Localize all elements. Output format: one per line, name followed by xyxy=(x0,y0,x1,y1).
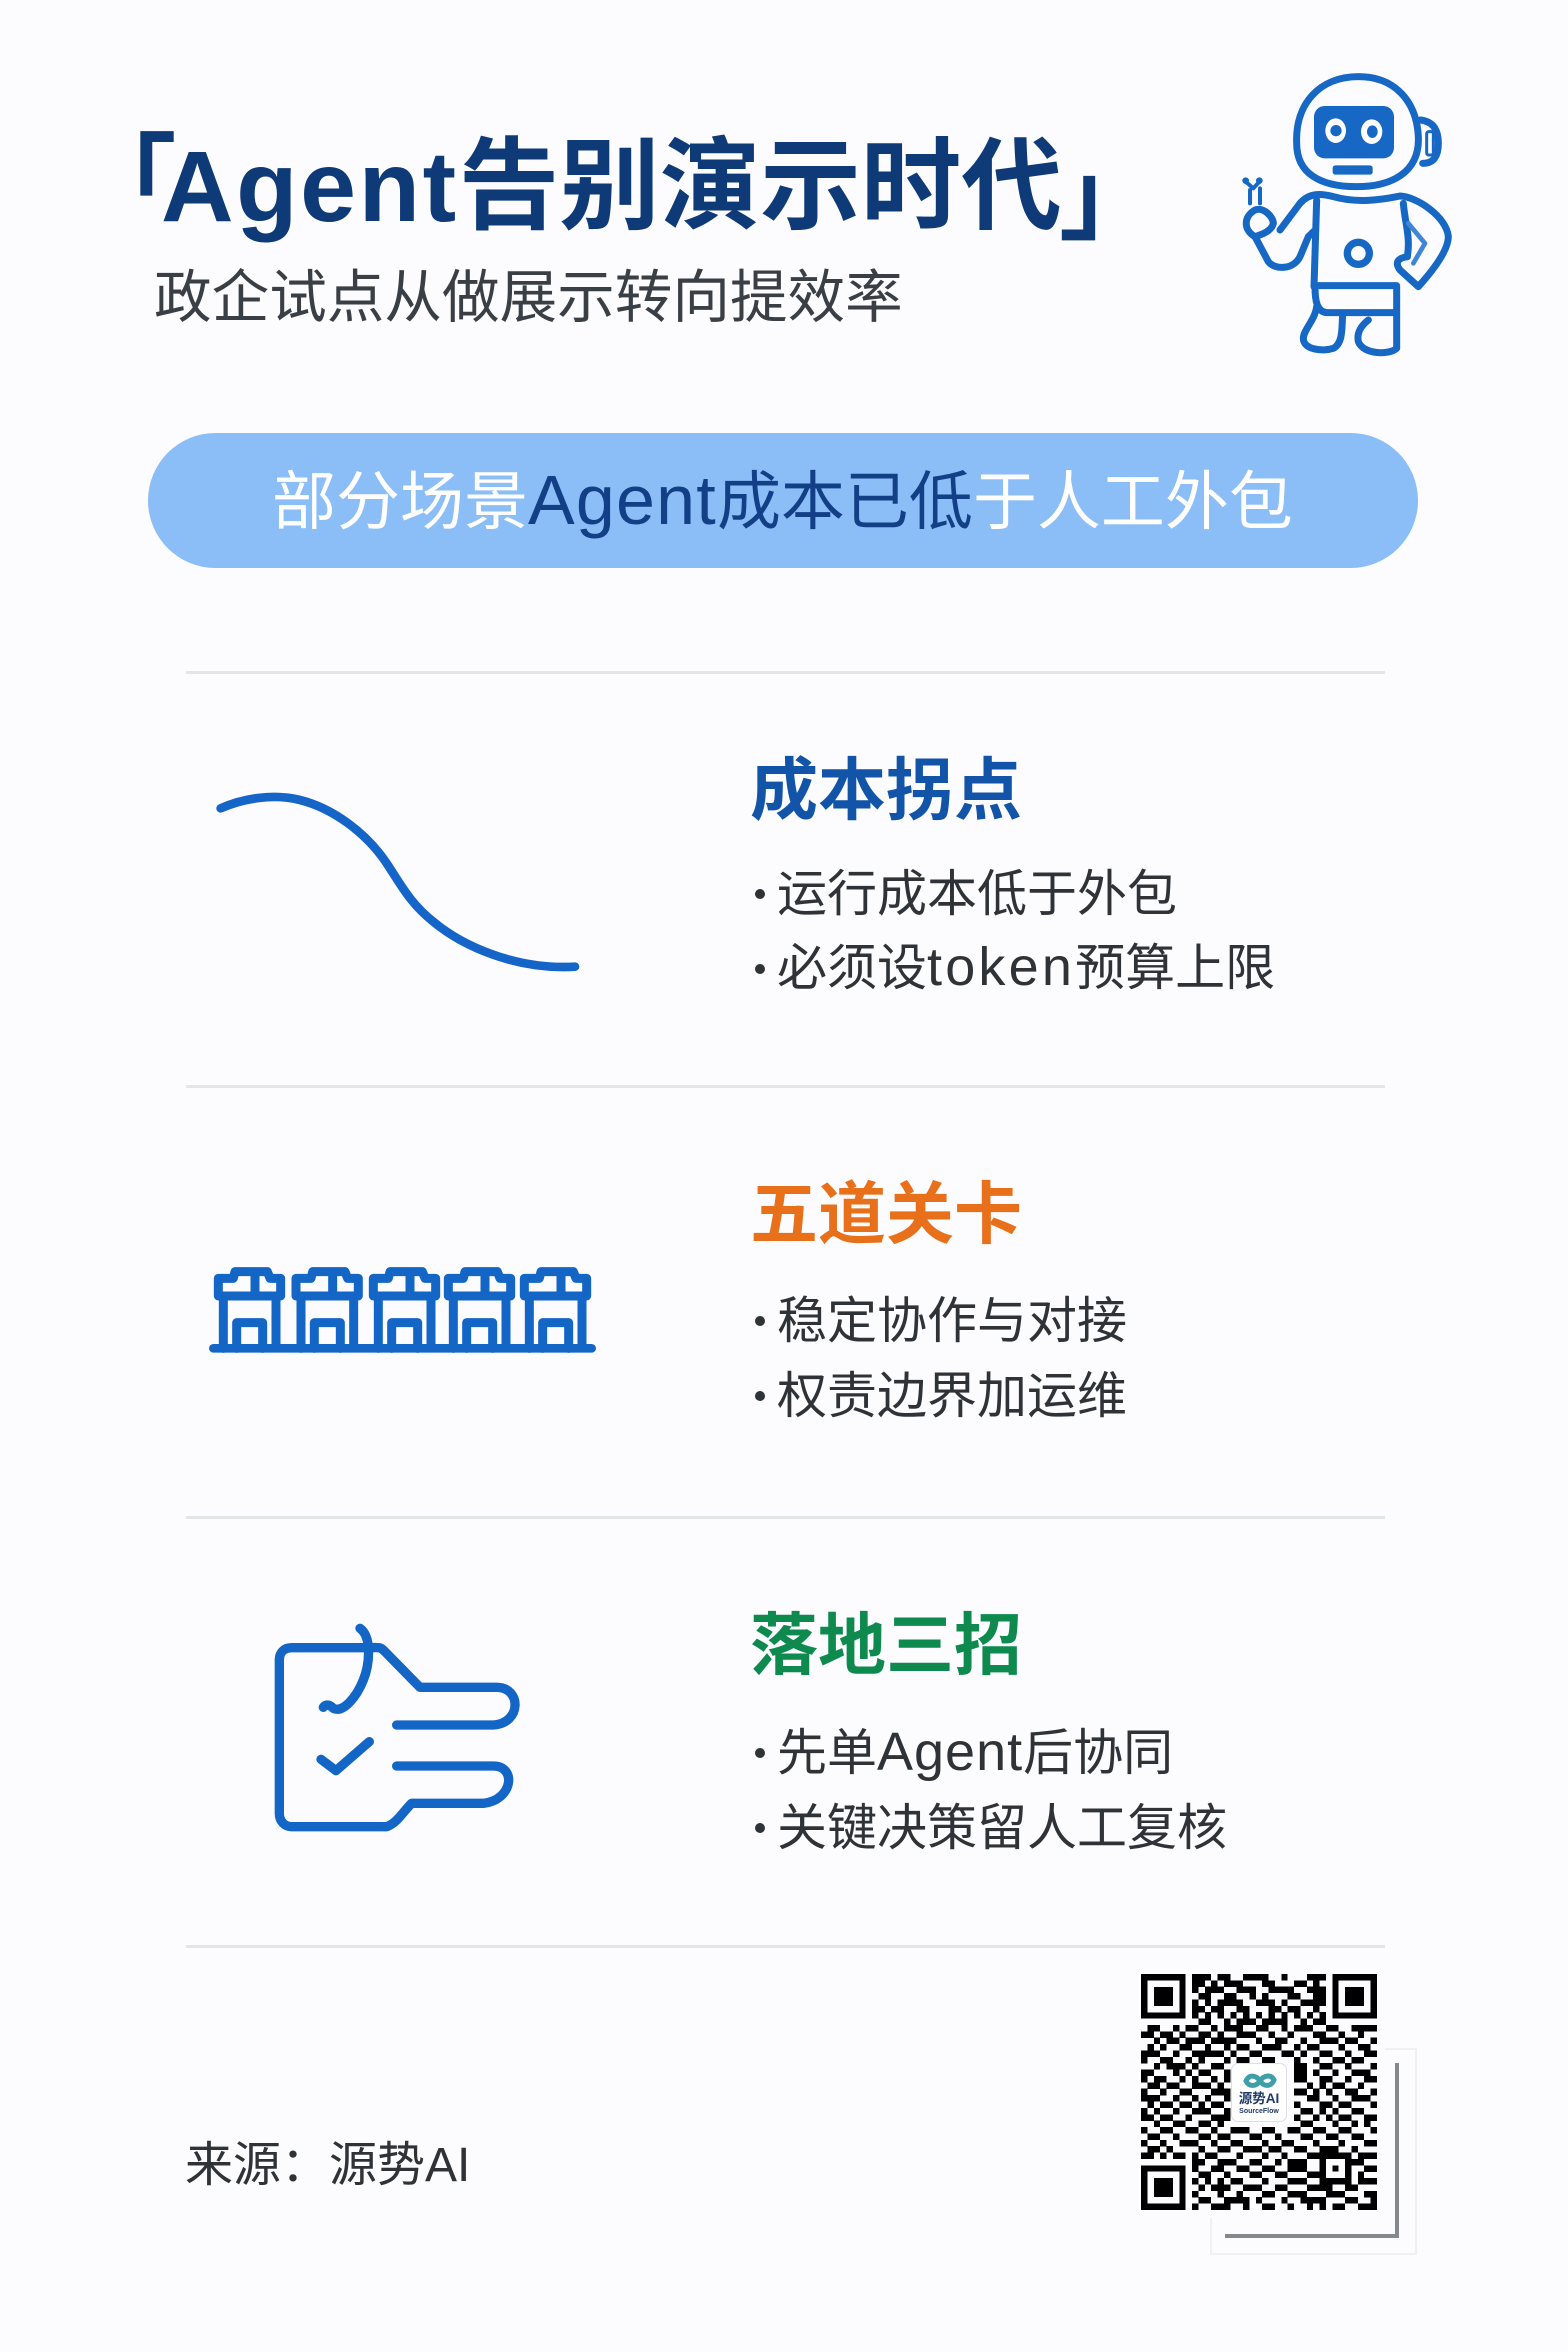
panel: 落地三招 xyxy=(274,1608,1227,1856)
bullet marker xyxy=(755,1823,765,1833)
bullet marker xyxy=(755,964,765,974)
logo text: 源势AI xyxy=(1239,2091,1279,2106)
banner pill: 部分场景Agent成本已低于人工外包 xyxy=(272,461,1293,539)
icon: falling cost curve xyxy=(216,792,580,972)
QR code block xyxy=(1141,1974,1417,2255)
decorative frame behind QR xyxy=(1210,2048,1417,2255)
icon: robot mascot xyxy=(1242,73,1452,356)
logo mark xyxy=(1243,2074,1277,2088)
bullet marker xyxy=(755,1391,765,1401)
title: 」 xyxy=(1059,141,1160,253)
bullet text: 先单Agent后协同 xyxy=(777,1722,1173,1782)
QR modules xyxy=(1141,1974,1377,2210)
icon: checklist hand xyxy=(274,1624,520,1832)
bullet text: 稳定协作与对接 xyxy=(777,1293,1127,1349)
icon: five gates xyxy=(209,1267,596,1353)
bullet marker xyxy=(755,1748,765,1758)
QR centre logo xyxy=(1231,2063,1287,2122)
source line: 来源：源势AI xyxy=(185,2139,470,2192)
bullet text: 权责边界加运维 xyxy=(777,1368,1127,1424)
bullet marker xyxy=(755,889,765,899)
bullet text: 运行成本低于外包 xyxy=(777,866,1177,922)
title: 「 xyxy=(76,127,177,239)
banner pill xyxy=(148,433,1418,568)
frame corner xyxy=(1225,2063,1399,2238)
heading: 落地三招 xyxy=(750,1608,1022,1684)
logo subtext: SourceFlow xyxy=(1239,2108,1279,2115)
QR white backing xyxy=(1133,1966,1385,2218)
bullet marker xyxy=(755,1316,765,1326)
heading: 五道关卡 xyxy=(750,1177,1022,1253)
subtitle: 政企试点从做展示转向提效率 xyxy=(154,266,903,330)
title: Agent告别演示时代 xyxy=(161,131,1062,243)
panel: 五道关卡 xyxy=(209,1177,1127,1424)
panel: 成本拐点 xyxy=(216,753,1275,997)
bullet text: 关键决策留人工复核 xyxy=(777,1800,1227,1856)
bullet text: 必须设token预算上限 xyxy=(777,937,1275,997)
heading: 成本拐点 xyxy=(750,753,1022,829)
